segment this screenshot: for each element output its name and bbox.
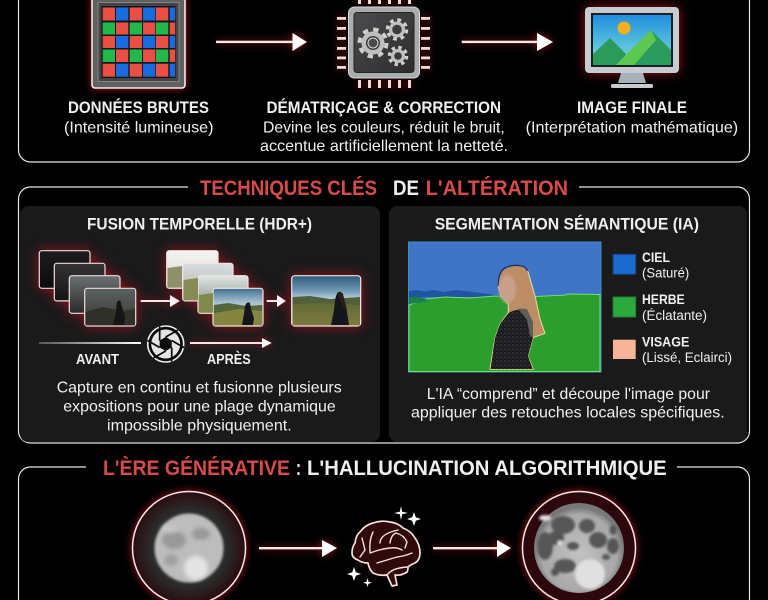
icon: AI brain with sparkles [342,506,426,592]
heading: semantic segmentation: SEGMENTATION SÉMANTIQUE (IA) [435,214,699,233]
label: after: APRÈS [207,351,251,368]
panel: semantic segmentation [389,206,747,442]
arrow: bright stack to result [267,295,286,307]
label: final image: IMAGE FINALE [577,99,687,117]
legend: face: VISAGE [642,334,689,350]
legend: sky: CIEL [642,249,670,265]
heading: generative era: L'HALLUCINATION ALGORITHMIQUE [307,456,667,480]
text: segmentation description: appliquer des retouches locales spécifiques. [411,405,725,422]
arrow: timeline before [39,342,141,344]
image: segmented photo [408,242,601,372]
heading: generative era: L'ÈRE GÉNÉRATIVE [103,455,290,480]
label: demosaicing and correction [260,98,508,155]
label: raw data: DONNÉES BRUTES [68,98,209,117]
heading: generative era [103,455,667,480]
legend: face [613,334,732,365]
icon: Bayer sensor [92,0,185,88]
text: temporal fusion description: impossible physiquement. [107,418,292,435]
panel: generative era [18,455,750,600]
arrow: dark to bright stack [141,295,180,307]
icon: monitor with landscape [585,7,679,88]
arrow: sensor to processing [216,33,307,51]
icon: lower gear [390,48,406,64]
heading: generative era: : [296,456,301,480]
label: final image: (Interprétation mathématique) [526,120,738,136]
legend: grass: HERBE [642,291,685,307]
heading: key techniques: TECHNIQUES CLÉS [200,175,377,200]
arrow: processing to final image [462,33,553,51]
legend: grass [613,291,707,323]
legend: face: (Lissé, Eclairci) [642,350,732,365]
label: demosaicing and correction: Devine les couleurs, réduit le bruit, [263,120,505,136]
label: before: AVANT [76,351,119,368]
icon: processor with gears [337,0,430,88]
arrow: AI to detailed moon [433,540,511,557]
image: merged HDR result [292,276,361,326]
label: demosaicing and correction: DÉMATRIÇAGE & CORRECTION [266,98,501,117]
text: segmentation description: L'IA “comprend” et découpe l'image pour [427,386,711,403]
label: raw data [64,98,213,136]
heading: temporal fusion: FUSION TEMPORELLE (HDR+) [87,214,312,233]
image: detailed moon [522,492,636,600]
panel: key techniques frame [18,175,750,443]
label: demosaicing and correction: accentue artificiellement la netteté. [260,138,508,155]
heading: key techniques: DE [393,176,419,200]
heading: key techniques [200,175,568,200]
panel: temporal fusion [20,206,380,442]
label: raw data: (Intensité lumineuse) [64,120,213,136]
text: temporal fusion description: expositions pour une plage dynamique [63,399,336,416]
panel: raw-to-image pipeline [18,0,750,162]
legend: sky [613,249,689,281]
text: segmentation description [411,386,725,422]
image stack: bright exposures [167,251,263,326]
text: temporal fusion description [57,380,342,435]
legend: grass: (Éclatante) [642,308,707,323]
heading: key techniques: L'ALTÉRATION [426,175,568,200]
icon: large gear [360,30,386,56]
image stack: dark exposures [39,251,136,326]
arrow: blurry moon to AI [259,540,337,557]
legend: sky: (Saturé) [642,266,689,281]
label: final image [526,99,738,136]
image: blurry moon [132,492,246,600]
icon: camera shutter [147,326,184,362]
arrow: timeline after [190,338,272,348]
icon: upper gear [388,20,406,39]
figure: segmented person [490,265,545,369]
text: temporal fusion description: Capture en continu et fusionne plusieurs [57,380,342,397]
